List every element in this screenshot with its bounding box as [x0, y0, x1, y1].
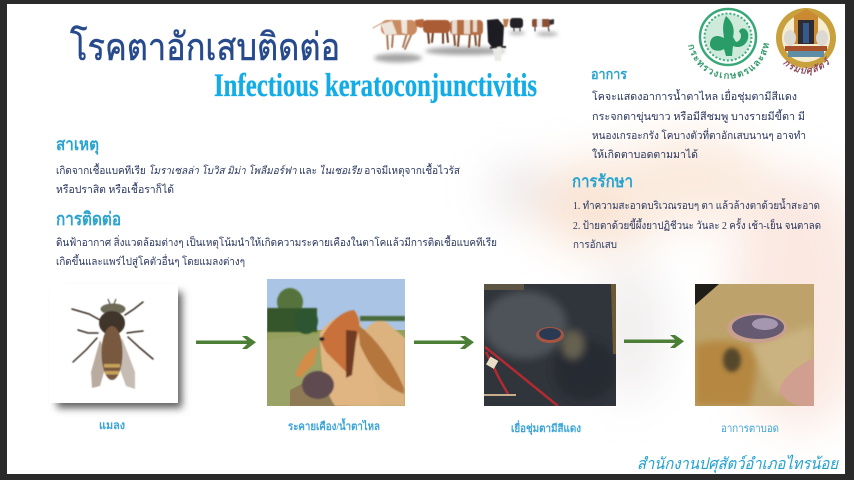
- logo: Ministry of Agriculture: [688, 8, 770, 79]
- text: symptoms: [592, 89, 806, 161]
- caption: red conjunctiva: เยื่อชุ่มตามีสีแดง: [511, 420, 581, 436]
- image: herd of cows: [373, 18, 558, 62]
- text: transmission: เกิดขึ้นและแพร่ไปสู่โคตัวอื่นๆ โดยแมลงต่างๆ: [56, 254, 245, 268]
- caption: blindness: อาการตาบอด: [721, 423, 779, 435]
- logo: Department of Livestock Development: [776, 8, 836, 76]
- text: symptoms: กระจกตาขุ่นขาว หรือมีสีชมพู บางรายมีขี้ตา มี: [592, 109, 805, 123]
- text: treatment: 2. ป้ายตาด้วยขี้ผึ้งยาปฏิชีวนะ วันละ 2 ครั้ง เช้า-เย็น จนตาลด: [573, 218, 821, 232]
- heading: cause: สาเหตุ: [56, 135, 99, 155]
- panel: symptoms: [591, 68, 806, 161]
- image: fly: [49, 284, 182, 408]
- text: cause: [56, 163, 461, 196]
- heading: symptoms: อาการ: [591, 68, 627, 83]
- caption: irritation and tearing: ระคายเคือง/น้ำตาไหล: [288, 418, 380, 433]
- heading: treatment: การรักษา: [572, 172, 633, 191]
- image: cow with irritated eye: [267, 279, 405, 406]
- image: black cow with red eye: [483, 284, 617, 406]
- text: transmission: [56, 235, 497, 268]
- image: cow with cloudy eye: [695, 284, 814, 406]
- arrow: fly to irritation: [196, 336, 256, 349]
- text: treatment: 1. ทำความสะอาดบริเวณรอบๆ ตา แล้วล้างตาด้วยน้ำสะอาด: [573, 198, 820, 212]
- arrow: red conjunctiva to blindness: [624, 335, 684, 348]
- text: cause: เกิดจากเชื้อแบคทีเรีย โมราเซลล่า โบวิส มิม่า โพลีมอร์ฟา และ ไนเซอเรีย อาจมีเหตุจากเชื้อไวรัส: [56, 163, 461, 177]
- panel: cause: [56, 135, 461, 196]
- text: cause: หรือปราสิต หรือเชื้อราก็ได้: [56, 182, 174, 196]
- panel: transmission: [56, 209, 497, 268]
- logo caption: department: กรมปศุสัตว์: [783, 56, 830, 76]
- heading: transmission: การติดต่อ: [56, 209, 121, 229]
- text: treatment: [573, 198, 821, 251]
- panel: treatment: [572, 172, 821, 251]
- caption: insects: แมลง: [99, 420, 125, 432]
- text: symptoms: หนองเกรอะกรัง โคบางตัวที่ตาอักเสบนานๆ อาจทำ: [592, 128, 806, 142]
- title: โรคตาอักเสบติดต่อ: [70, 25, 340, 69]
- text: symptoms: โคจะแสดงอาการน้ำตาไหล เยื่อชุ่มตามีสีแดง: [592, 89, 797, 103]
- text: treatment: การอักเสบ: [573, 239, 617, 251]
- arrow: irritation to red conjunctiva: [414, 336, 474, 349]
- text: transmission: ดินฟ้าอากาศ สิ่งแวดล้อมต่างๆ เป็นเหตุโน้มนำให้เกิดความระคายเคืองในตาโคแล้วมีการติดเชื้อแบคทีเรีย: [56, 235, 497, 249]
- footer: office name: สำนักงานปศุสัตว์อำเภอไทรน้อย: [637, 454, 839, 474]
- subtitle: Infectious keratoconjunctivitis: [214, 68, 537, 104]
- text: symptoms: ให้เกิดตาบอดตามมาได้: [592, 148, 698, 161]
